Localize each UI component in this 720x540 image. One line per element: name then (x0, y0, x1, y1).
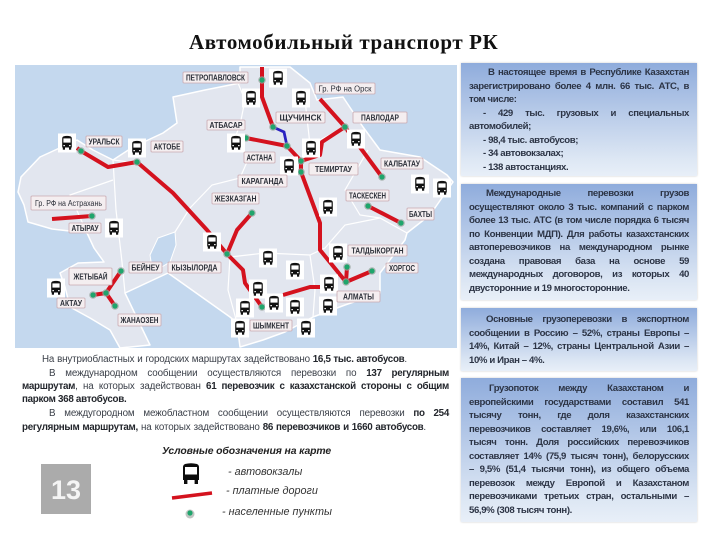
city labels: ЖАНАОЗЕН (120, 316, 159, 325)
panel: international freight: Международные перевозки грузов (486, 188, 689, 199)
legend text: toll roads: - платные дороги (226, 485, 318, 497)
panel: international freight: международных договоров, из которых 40 (469, 269, 689, 280)
panel: vehicles registered: зарегистрировано более 4 млн. 66 тыс. АТС, в (469, 81, 689, 92)
city labels: ХОРГОС (389, 264, 415, 273)
land area (18, 67, 453, 348)
panel: vehicles registered: В настоящее время в Республике Казахстан (488, 67, 689, 78)
panel: international freight: автоперевозчиков на международном рынке (469, 242, 689, 253)
Aral Sea (150, 232, 176, 268)
panel: vehicles registered: - 34 автовокзалах; (483, 148, 563, 159)
city labels: ТАСКЕСКЕН (349, 192, 386, 200)
panel: international freight: более 13 тыс. АТС (в том числе порядка 6 тысяч (469, 215, 689, 226)
panel: international freight: двусторонние и 19 многосторонние. (469, 283, 630, 294)
city labels: КАРАГАНДА (242, 177, 284, 186)
regional borders (70, 83, 407, 323)
panel: international freight (461, 184, 697, 300)
panel: cargo flow with Europe: – 9,5% (51,4 тысячи тонн), из общего объема (469, 464, 689, 475)
panel: vehicles registered: том числе: (469, 94, 517, 105)
panel: vehicles registered: - 138 автостанциях. (483, 162, 568, 173)
panel: vehicles registered: автомобилей; (469, 121, 531, 132)
city labels: ШЫМКЕНТ (253, 322, 289, 330)
city labels: ЖЕТЫБАЙ (73, 272, 108, 282)
city labels: АТЫРАУ (72, 224, 99, 233)
road: Atbasar to Almaty (246, 138, 346, 282)
city labels: КАЛБАТАУ (384, 160, 421, 168)
road: Beyneu junctions (93, 271, 121, 306)
text block: bus routes: В международном сообщении осуществляются перевозки по 137 регулярным (49, 368, 449, 379)
panel: cargo flow with Europe: Грузопоток между Казахстаном и (489, 383, 689, 394)
panel: cargo flow with Europe: перевозчиков составляет 19,6%, или 106,1 (469, 424, 689, 435)
road: Orsk to Kalbatau (320, 99, 382, 177)
panel: cargo flow with Europe: тысячу тонн, где доля казахстанских (469, 410, 689, 421)
road: Uralsk to Shymkent (77, 148, 262, 307)
panel: export shipments: сообщении в Россию – 52%, страны Европы – (469, 328, 689, 339)
text block: bus routes: регулярным маршрутам, на которых задействовано 86 перевозчиков и 1660 автобусов. (22, 422, 426, 433)
panel: international freight: по Конвенции МДП). Для работы казахстанских (469, 229, 689, 240)
city labels: АСТАНА (246, 154, 273, 162)
settlement markers (77, 76, 405, 311)
panel: export shipments (461, 308, 697, 371)
panel: export shipments: 14%, Китай – 12%, страны Центральной Азии – (469, 341, 689, 352)
toll roads (52, 67, 401, 307)
panel: vehicles registered (461, 63, 697, 176)
panel: international freight: осуществляют около 3 тыс. компаний с парком (469, 202, 689, 213)
city labels: АЛМАТЫ (343, 292, 374, 302)
city labels: ТАЛДЫКОРГАН (352, 246, 404, 256)
city labels: АКТОБЕ (154, 142, 181, 152)
panel: cargo flow with Europe: составляет 14% (75,9 тысяч тонн), белорусских (469, 451, 689, 462)
city labels: БАХТЫ (409, 210, 432, 219)
text block: bus routes: парком 368 автобусов. (22, 394, 126, 405)
map background (15, 65, 457, 348)
panel: cargo flow with Europe: перевозчиками третьих стран, остальными – (469, 491, 689, 502)
road: Taldykorgan, Khorgos (346, 267, 372, 282)
map of Kazakhstan (15, 65, 457, 348)
panel: cargo flow with Europe (461, 378, 697, 522)
road: Astrakhan to Atyrau (52, 216, 92, 219)
text block: bus routes: На внутриобластных и городских маршрутах задействовано 16,5 тыс. автобусов. (42, 354, 407, 365)
city labels: УРАЛЬСК (88, 138, 120, 146)
road: Zhezkazgan (227, 213, 252, 254)
page number (41, 464, 91, 514)
panel: cargo flow with Europe: тысяч тонн. Доля российских перевозчиков (469, 437, 689, 448)
city labels: ЖЕЗКАЗГАН (214, 194, 257, 204)
road: Temirtau to Pavlodar (301, 127, 345, 161)
panel: cargo flow with Europe: европейскими государствами составил 541 (469, 397, 689, 408)
bus station icons (47, 68, 451, 338)
city labels: ПАВЛОДАР (361, 114, 400, 122)
road: Petropavlovsk to Astana (262, 67, 273, 127)
city labels: Гр. РФ на Орск (318, 84, 372, 94)
panel: export shipments: 10% и Иран – 4%. (469, 355, 544, 366)
panel: vehicles registered: - 98,4 тыс. автобусов; (483, 135, 578, 146)
panel: international freight: создана правовая база на основе 59 (469, 256, 689, 267)
legend (162, 446, 332, 518)
city labels: КЫЗЫЛОРДА (172, 264, 218, 272)
panel: export shipments: Основные грузоперевозки в экспортном (486, 314, 689, 325)
panel: cargo flow with Europe: перевозок между Европой и Казахстаном (469, 478, 689, 489)
text block: bus routes: В междугородном межобластном сообщении осуществляются перевозки по 254 (49, 408, 449, 419)
road: Taskesken to Bakhty (368, 206, 401, 223)
text block: bus routes (22, 354, 450, 433)
legend icon: bus (183, 463, 199, 484)
panel: vehicles registered: - 429 тыс. грузовых и специальных (483, 108, 689, 119)
city labels: ПЕТРОПАВЛОВСК (186, 74, 245, 82)
blue road section (273, 127, 287, 146)
title: Автомобильный транспорт РК (189, 30, 498, 54)
city labels (31, 72, 434, 331)
legend text: settlements: - населенные пункты (222, 506, 332, 518)
city labels: ЩУЧИНСК (280, 114, 322, 122)
page number: 13 (51, 475, 81, 505)
legend text: bus stations: - автовокзалы (228, 466, 302, 478)
road: Shymkent to Almaty (283, 287, 330, 295)
legend icon: settlement (186, 510, 194, 518)
city labels: АКТАУ (60, 299, 83, 308)
legend icon: toll road (172, 491, 212, 500)
legend title: Условные обозначения на карте (162, 446, 331, 457)
city labels: Гр. РФ на Астрахань (35, 199, 102, 208)
city labels: БЕЙНЕУ (132, 264, 160, 272)
panel: cargo flow with Europe: 56,9% (308 тысяч тонн). (469, 505, 572, 516)
city labels: АТБАСАР (210, 121, 243, 130)
city labels: ТЕМИРТАУ (315, 165, 353, 174)
text block: bus routes: маршрутам, на которых задействован 61 перевозчик с казахстанской стороны с общим (22, 381, 449, 392)
